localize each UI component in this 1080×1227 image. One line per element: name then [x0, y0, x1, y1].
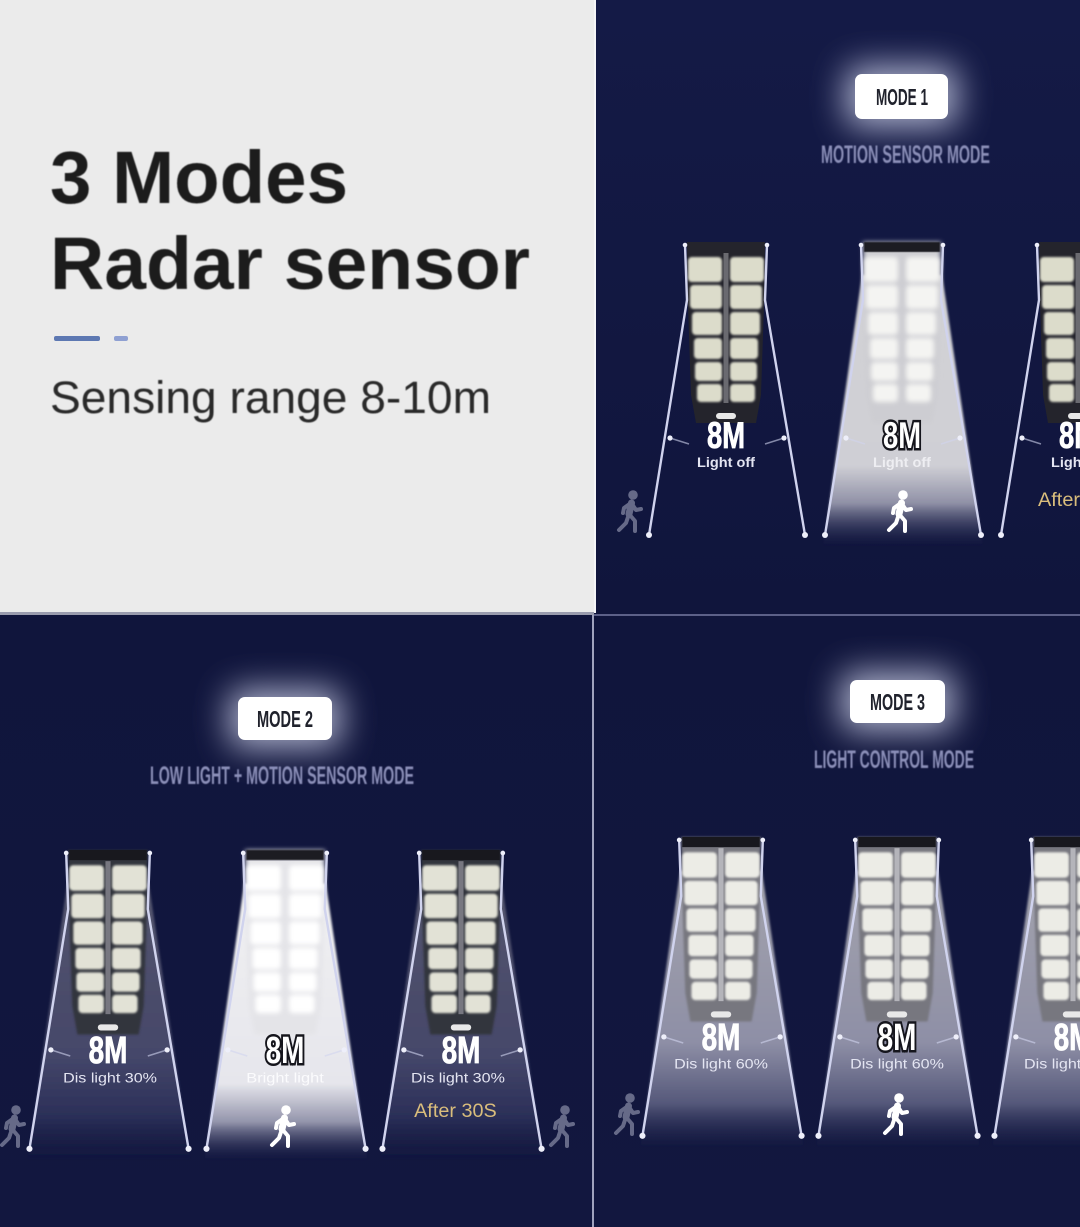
lamp: mode 3 second: 8M — [878, 1016, 916, 1058]
icon: walker outside range — [619, 490, 641, 531]
panel: mode 3 — [616, 672, 1080, 1148]
lamp: mode 2 dim after delay: 8M — [442, 1029, 480, 1071]
icon: walker outside range — [2, 1105, 24, 1146]
icon: walker in range — [272, 1105, 294, 1146]
subheading: Sensing range 8-10m — [50, 372, 491, 423]
lamp: mode 2 dim — [26, 850, 192, 1161]
icon: walker outside range — [616, 1093, 638, 1134]
lamp: mode 1 on — [822, 242, 984, 547]
mode 1 badge — [846, 66, 957, 127]
lamp: mode 1 off: 8M — [707, 415, 745, 456]
lamp: mode 2 bright — [203, 850, 369, 1161]
lamp: mode 3 first — [639, 837, 805, 1148]
panel: mode 2 — [2, 689, 573, 1161]
lamp: mode 2 dim: 8M — [89, 1029, 127, 1071]
lamp: mode 1 off — [646, 242, 808, 538]
lamp: mode 3 second: Dis light 60% — [850, 1056, 944, 1072]
mode 2 badge: MODE 2 — [257, 706, 313, 732]
lamp: mode 2 dim after delay — [379, 850, 545, 1161]
lamp: mode 2 dim after delay: After 30S — [414, 1100, 497, 1122]
icon: walker in range — [885, 1093, 907, 1134]
lamp: mode 3 second — [815, 837, 981, 1148]
mode 2 subtitle: LOW LIGHT + MOTION SENSOR MODE — [150, 762, 414, 790]
lamp: mode 3 third — [991, 837, 1080, 1148]
lamp: mode 1 on: Light off — [873, 454, 931, 470]
mode 1 badge: MODE 1 — [876, 84, 928, 110]
panel: title — [0, 0, 594, 613]
lamp: mode 1 on: 8M — [883, 415, 921, 456]
lamp: mode 2 bright: Bright light — [246, 1070, 324, 1086]
heading line two: Radar sensor — [50, 222, 530, 305]
mode 3 badge: MODE 3 — [870, 689, 925, 715]
lamp: mode 2 dim after delay: Dis light 30% — [411, 1070, 505, 1086]
panel: mode 1 — [619, 66, 1080, 547]
lamp: mode 1 off after delay — [998, 242, 1080, 538]
mode 3 badge — [841, 672, 954, 731]
mode 2 badge — [229, 689, 341, 748]
icon: walker in range — [889, 490, 911, 531]
lamp: mode 2 bright: 8M — [266, 1029, 304, 1071]
accent dashes — [54, 336, 128, 341]
heading: 3 Modes — [50, 136, 348, 219]
lamp: mode 3 first: Dis light 60% — [674, 1056, 768, 1072]
lamp: mode 1 off: Light off — [697, 454, 755, 470]
lamp: mode 2 dim: Dis light 30% — [63, 1070, 157, 1086]
icon: walker leaving range — [551, 1105, 573, 1146]
lamp: mode 3 first: 8M — [702, 1016, 740, 1058]
